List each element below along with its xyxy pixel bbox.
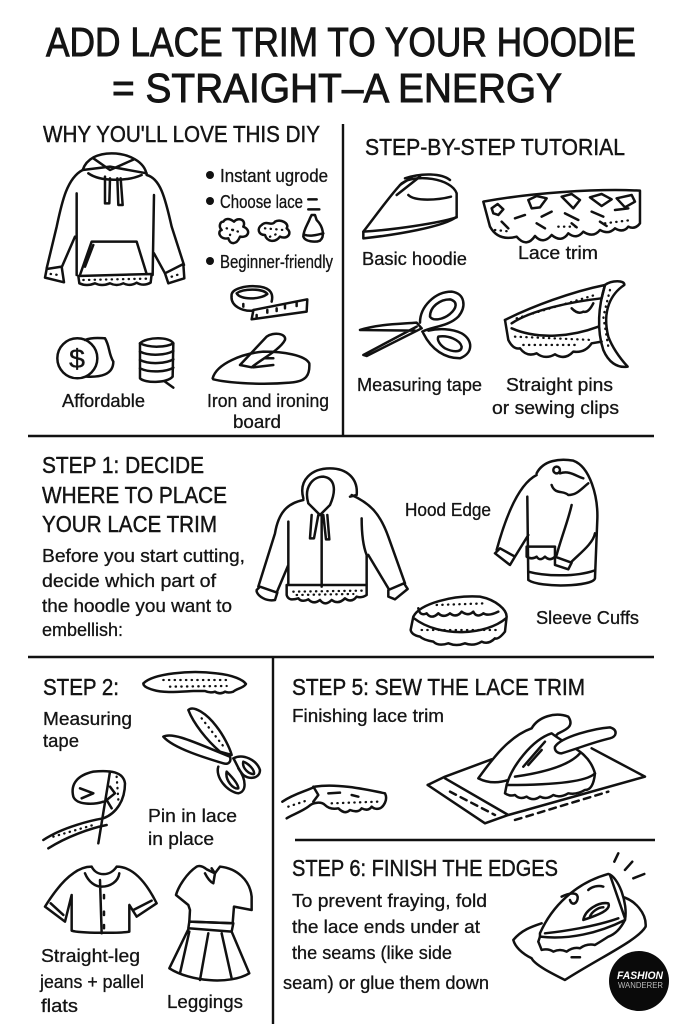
text: step 1 description: Before you start cutting, — [42, 546, 245, 566]
label: pin in lace: Pin in lace — [148, 806, 237, 826]
bullet list: Beginner-friendly — [220, 252, 333, 272]
labels: tools: Basic hoodie — [362, 249, 467, 269]
label: iron and ironing board: Iron and ironing — [207, 391, 329, 411]
heading: step 1: STEP 1: DECIDE — [42, 452, 204, 478]
panel: step-by-step tutorial — [357, 134, 640, 418]
label: straight-leg jeans + ballet flats: flats — [41, 996, 78, 1016]
icon: iron on fabric — [428, 715, 645, 823]
panel: step 6 — [283, 853, 669, 1011]
text: step 6 description: seam) or glue them down — [283, 973, 489, 993]
text: step 6 description — [283, 891, 489, 993]
title: = STRAIGHT–A ENERGY — [112, 65, 562, 111]
label: hood edge: Hood Edge — [405, 500, 491, 520]
logo: Fashion Wanderer badge: WANDERER — [618, 981, 663, 990]
heading: why you'll love this DIY: WHY YOU'LL LOVE THIS DIY — [43, 121, 320, 147]
labels: tools: Lace trim — [518, 243, 598, 263]
icon: iron shaped item — [363, 174, 457, 238]
logo: Fashion Wanderer badge — [609, 951, 669, 1011]
label: straight-leg jeans + ballet flats — [39, 946, 144, 1016]
label: measuring tape — [43, 709, 132, 751]
text: finishing lace trim: Finishing lace trim — [292, 706, 444, 726]
text: step 1 description — [42, 546, 245, 640]
icon: lace loop with clip — [505, 281, 628, 367]
label: pin in lace: in place — [148, 829, 214, 849]
heading: step-by-step tutorial: STEP-BY-STEP TUTORIAL — [365, 134, 625, 160]
icon: lace samples — [219, 199, 323, 243]
icon: scissors — [163, 709, 260, 793]
icon: lace strip end — [282, 786, 386, 818]
text: step 6 description: To prevent fraying, fold — [292, 891, 487, 911]
panel: step 2 — [39, 672, 260, 1016]
icon: dollar sign: $ — [69, 344, 85, 374]
icon: iron with sparkle — [513, 853, 646, 980]
icon: dress — [169, 866, 252, 980]
label: measuring tape: tape — [43, 731, 79, 751]
text: step 6 description: the lace ends under at — [292, 917, 480, 937]
icon: hoodie with lace hem — [45, 153, 184, 285]
labels: tools: or sewing clips — [492, 398, 619, 418]
icon: lace loop — [411, 596, 507, 645]
heading: step 1: WHERE TO PLACE — [42, 482, 227, 508]
label: sleeve cuffs: Sleeve Cuffs — [536, 608, 639, 628]
icon: zip hoodie — [257, 468, 408, 603]
icon: scissors — [360, 292, 470, 358]
text: step 1 description: embellish: — [42, 620, 123, 640]
heading: step 6: STEP 6: FINISH THE EDGES — [292, 855, 558, 881]
icon: coin and note — [57, 338, 113, 378]
labels: tools: Measuring tape — [357, 375, 482, 395]
bullet list — [206, 166, 333, 272]
heading: step 2: STEP 2: — [43, 674, 119, 700]
panel: step 1 — [42, 452, 639, 645]
bullet list: Choose lace — [220, 192, 303, 212]
heading: step 1 — [42, 452, 227, 537]
panel: why you'll love this DIY — [43, 121, 333, 432]
heading: step 5: STEP 5: SEW THE LACE TRIM — [292, 674, 585, 700]
heading: step 1: YOUR LACE TRIM — [42, 511, 217, 537]
label: affordable: Affordable — [62, 391, 145, 411]
labels: tools — [357, 243, 619, 418]
icon: hoodie back view — [495, 460, 597, 585]
text: step 1 description: decide which part of — [42, 571, 217, 591]
icon: pinned lace ribbon — [43, 771, 125, 848]
text: step 6 description: the seams (like side — [292, 943, 452, 963]
icon: tape measure — [232, 286, 307, 319]
label: iron and ironing board — [207, 391, 329, 432]
bullet list: Instant ugrode — [220, 166, 328, 186]
icon: cardigan — [45, 867, 157, 933]
title — [46, 19, 636, 111]
icon: iron and ironing board — [213, 334, 309, 384]
text: step 1 description: the hoodle you want to — [42, 596, 232, 616]
icon: lace trim — [483, 190, 640, 242]
icon: thread spool — [140, 338, 173, 388]
label: straight-leg jeans + ballet flats: jeans + pallel — [39, 972, 144, 992]
panel: step 5 — [282, 674, 645, 823]
label: iron and ironing board: board — [233, 412, 281, 432]
icon: lace strip — [143, 672, 246, 693]
label: measuring tape: Measuring — [43, 709, 132, 729]
logo: Fashion Wanderer badge: FASHION — [617, 970, 664, 982]
label: straight-leg jeans + ballet flats: Straight-leg — [41, 946, 140, 966]
labels: tools: Straight pins — [506, 375, 613, 395]
label: pin in lace — [148, 806, 237, 849]
label: leggings: Leggings — [167, 992, 243, 1012]
